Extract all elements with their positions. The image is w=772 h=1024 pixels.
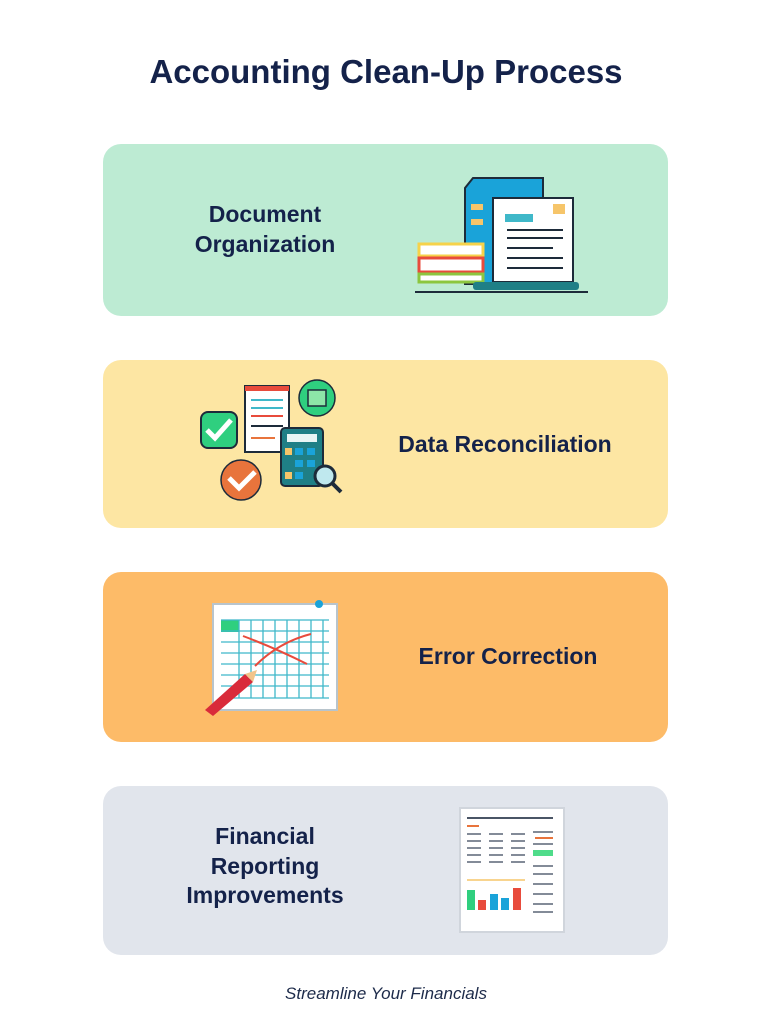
heading: financial reporting improvements: Improvements: [186, 882, 344, 908]
panel: financial reporting improvements: [103, 786, 668, 955]
heading: document organization: [195, 201, 335, 257]
icon: documents and books: [415, 177, 588, 293]
panel: error correction: [103, 572, 668, 742]
footer tagline: Streamline Your Financials: [285, 984, 487, 1003]
heading: financial reporting improvements: [186, 823, 344, 908]
heading: data reconciliation: Data Reconciliation: [398, 431, 612, 457]
heading: error correction: Error Correction: [419, 643, 597, 669]
icon: spreadsheet with pencil: [205, 600, 338, 716]
icon: checklist, calculator, magnifier: [200, 379, 342, 501]
heading: document organization: Document: [209, 201, 321, 227]
panel: document organization: [103, 144, 668, 316]
icon: financial report: [459, 807, 565, 933]
heading: financial reporting improvements: Reporting: [211, 852, 319, 878]
heading: document organization: Organization: [195, 231, 335, 257]
heading: financial reporting improvements: Financial: [215, 823, 315, 849]
title: Accounting Clean-Up Process: [149, 53, 623, 90]
panel: data reconciliation: [103, 360, 668, 528]
